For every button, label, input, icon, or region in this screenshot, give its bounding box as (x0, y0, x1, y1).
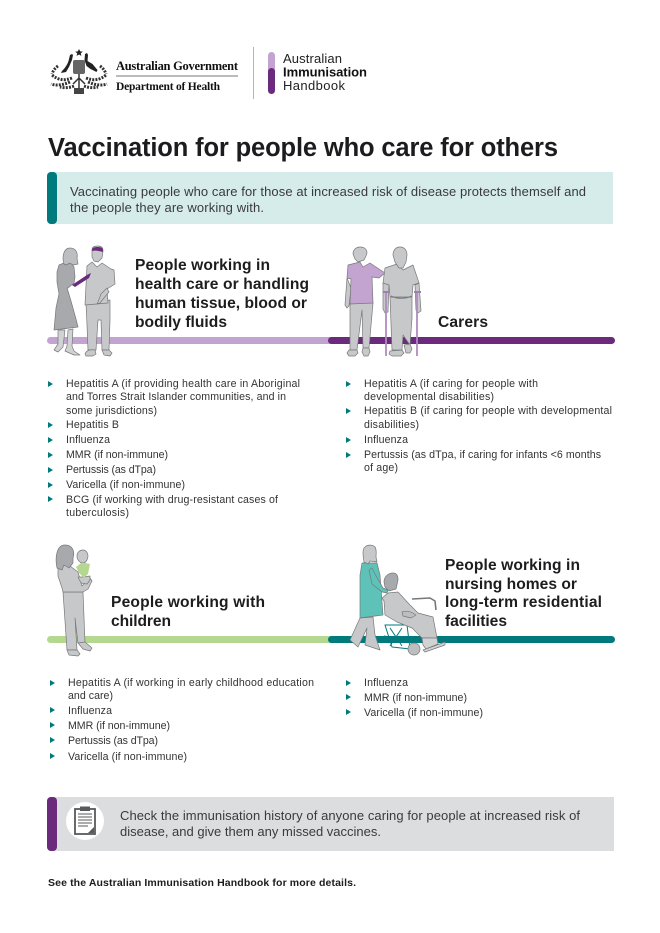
panel: check immunisation history callout: Check the immunisation history of anyone caring for people at increased risk of (120, 808, 580, 823)
icon: health workers (54, 246, 115, 356)
divider bar: health care and carers (47, 337, 615, 344)
footer note: See the Australian Immunisation Handbook for more details. (48, 877, 356, 889)
list: carers vaccines: disabilities) (364, 419, 419, 431)
list: health care vaccines: and Torres Strait Islander communities, and in (66, 391, 286, 403)
list: health care vaccines: some jurisdictions) (66, 405, 157, 417)
logo: Australian Immunisation Handbook (268, 51, 367, 94)
heading: health care: human tissue, blood or (135, 295, 307, 312)
list: health care vaccines: Pertussis (as dTpa) (66, 464, 156, 476)
list: nursing homes vaccines: MMR (if non-immune) (364, 692, 467, 704)
list: carers vaccines: of age) (364, 462, 398, 474)
heading: health care: health care or handling (135, 276, 309, 293)
list: carers vaccines (346, 378, 612, 474)
logo: Australian Immunisation Handbook: Australian (283, 51, 342, 66)
list: nursing homes vaccines (346, 677, 483, 719)
heading: nursing homes: long-term residential (445, 594, 602, 611)
divider bar: children and nursing homes (47, 636, 615, 643)
logo: Australian Immunisation Handbook: Handbook (283, 78, 346, 93)
panel: intro callout (47, 172, 613, 224)
icon: carer pushing wheelchair (350, 545, 445, 655)
logo: Department of Health wordmark: Department of Health (116, 81, 221, 93)
list: children vaccines: Pertussis (as dTpa) (68, 735, 158, 747)
list: children vaccines: Hepatitis A (if working in early childhood education (68, 677, 314, 689)
icon: clipboard (66, 802, 104, 840)
panel: intro callout: Vaccinating people who care for those at increased risk of disease protects themself and (70, 184, 586, 199)
panel: check immunisation history callout: disease, and give them any missed vaccines. (120, 824, 381, 839)
list: health care vaccines: Hepatitis A (if providing health care in Aboriginal (66, 378, 300, 390)
heading: nursing homes: nursing homes or (445, 576, 577, 593)
list: nursing homes vaccines: Varicella (if non-immune) (364, 707, 483, 719)
heading: children (111, 594, 265, 630)
logo: Department of Health wordmark (116, 59, 239, 93)
list: children vaccines: Varicella (if non-immune) (68, 751, 187, 763)
title: Vaccination for people who care for others (48, 134, 558, 162)
logo: Australian Immunisation Handbook: Immunisation (283, 64, 367, 80)
list: health care vaccines: Varicella (if non-immune) (66, 479, 185, 491)
icon: woman holding child (56, 545, 92, 656)
list: children vaccines (50, 677, 314, 763)
icon: carer with man on crutches (345, 247, 421, 356)
logo: Department of Health wordmark: Australian Government (116, 59, 239, 73)
list: children vaccines: MMR (if non-immune) (68, 720, 170, 732)
list: health care vaccines: tuberculosis) (66, 507, 129, 519)
heading: health care (135, 257, 309, 331)
heading: children: People working with (111, 594, 265, 611)
heading: carers: Carers (438, 314, 488, 331)
list: children vaccines: Influenza (68, 705, 112, 717)
list: health care vaccines: Hepatitis B (66, 419, 119, 431)
list: health care vaccines (48, 378, 300, 519)
panel: check immunisation history callout (47, 797, 614, 851)
logo: Australian Government crest (51, 49, 107, 94)
heading: nursing homes: People working in (445, 557, 580, 574)
list: health care vaccines: MMR (if non-immune) (66, 449, 168, 461)
heading: health care: bodily fluids (135, 314, 227, 331)
heading: nursing homes (445, 557, 602, 630)
list: carers vaccines: Influenza (364, 434, 408, 446)
list: health care vaccines: Influenza (66, 434, 110, 446)
list: carers vaccines: Hepatitis A (if caring for people with (364, 378, 538, 390)
list: carers vaccines: developmental disabilities) (364, 391, 494, 403)
list: health care vaccines: BCG (if working with drug-resistant cases of (66, 494, 278, 506)
list: children vaccines: and care) (68, 690, 113, 702)
heading: children: children (111, 613, 171, 630)
heading: nursing homes: facilities (445, 613, 507, 630)
list: carers vaccines: Hepatitis B (if caring for people with developmental (364, 405, 612, 417)
list: nursing homes vaccines: Influenza (364, 677, 408, 689)
panel: intro callout: the people they are working with. (70, 200, 264, 215)
list: carers vaccines: Pertussis (as dTpa, if caring for infants <6 months (364, 449, 601, 461)
heading: health care: People working in (135, 257, 270, 274)
